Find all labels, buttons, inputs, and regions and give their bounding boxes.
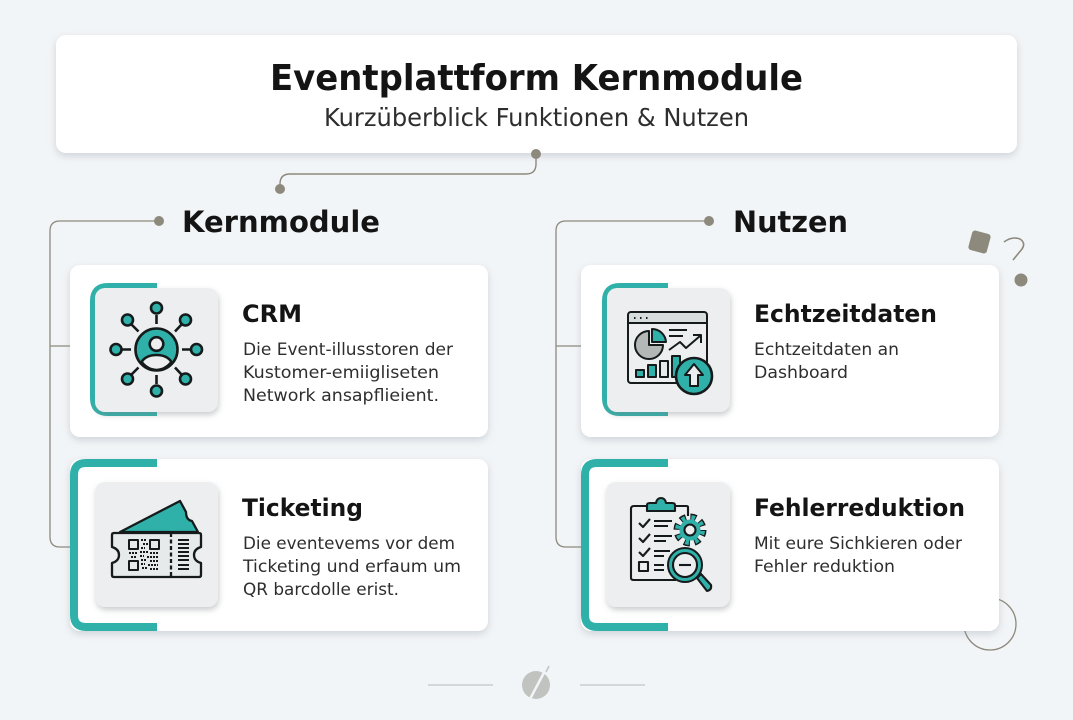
footer ornament bbox=[428, 666, 645, 699]
accent bracket bbox=[74, 463, 157, 627]
heading: Kernmodule: Kernmodule bbox=[182, 205, 380, 239]
QR code bbox=[129, 540, 159, 570]
decorative shapes top right bbox=[968, 230, 1028, 286]
decorative circle behind card bbox=[964, 598, 1016, 650]
card text: Echtzeitdaten an bbox=[754, 340, 899, 359]
card title: Fehlerreduktion bbox=[754, 494, 965, 522]
accent bracket bbox=[604, 286, 668, 414]
icon: clipboard with gear and magnifier bbox=[631, 498, 711, 591]
subtitle: Kurzüberblick Funktionen & Nutzen bbox=[324, 103, 749, 132]
card text bbox=[242, 534, 461, 599]
header panel bbox=[56, 35, 1017, 153]
card title: CRM bbox=[242, 300, 302, 328]
accent bracket bbox=[92, 286, 157, 414]
card text: Network ansapflieient. bbox=[243, 386, 439, 405]
card text: Dashboard bbox=[754, 363, 848, 382]
panel: Echtzeitdaten bbox=[581, 265, 999, 437]
card text: Die eventevems vor dem bbox=[243, 534, 455, 553]
icon: network person bbox=[110, 302, 202, 396]
card text: Ticketing und erfaum um bbox=[242, 557, 461, 576]
connector: Kernmodule bracket bbox=[50, 216, 164, 547]
title: Eventplattform Kernmodule bbox=[270, 58, 803, 99]
card text bbox=[754, 340, 899, 382]
card text bbox=[243, 340, 453, 405]
card text: Die Event-illusstoren der bbox=[243, 340, 453, 359]
icon tile bbox=[95, 482, 218, 607]
panel: CRM bbox=[70, 265, 488, 437]
card title: Echtzeitdaten bbox=[754, 300, 937, 328]
accent bracket bbox=[585, 463, 668, 627]
icon tile bbox=[607, 288, 730, 412]
card text: Fehler reduktion bbox=[754, 557, 895, 576]
card text: Mit eure Sichkieren oder bbox=[754, 534, 962, 553]
icon: dashboard bbox=[628, 312, 712, 394]
icon: ticket bbox=[112, 501, 201, 577]
connector: header to Kernmodule bbox=[275, 149, 541, 194]
card text: QR barcdolle erist. bbox=[243, 580, 399, 599]
icon tile bbox=[95, 288, 218, 412]
panel: Fehlerreduktion bbox=[581, 459, 999, 631]
card text: Kustomer-emiigliseten bbox=[243, 363, 439, 382]
heading: Nutzen: Nutzen bbox=[733, 205, 848, 239]
panel: Ticketing bbox=[70, 459, 488, 631]
connector: Nutzen bracket bbox=[556, 216, 714, 547]
card text bbox=[754, 534, 962, 576]
icon tile bbox=[606, 482, 730, 607]
card title: Ticketing bbox=[242, 494, 363, 522]
